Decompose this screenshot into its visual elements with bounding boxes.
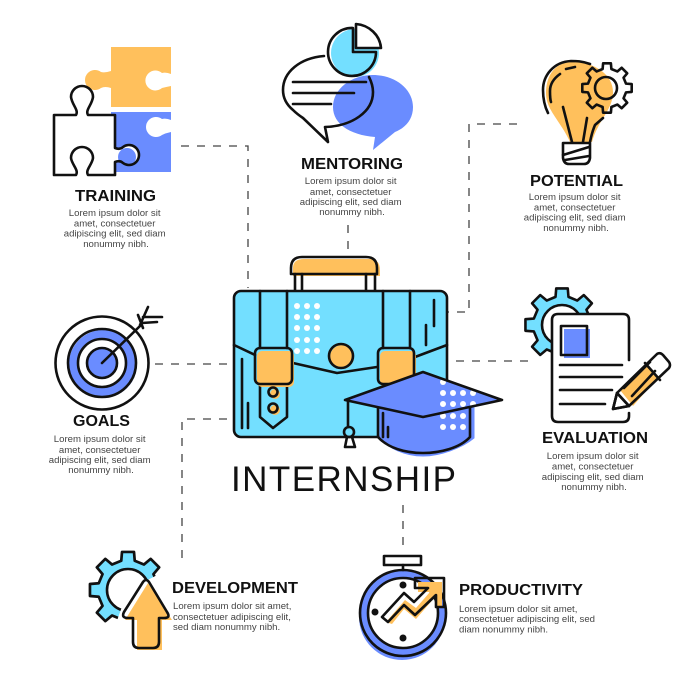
connector: development <box>182 419 227 566</box>
text: goals: Lorem ipsum dolor sit <box>54 434 146 445</box>
text: productivity: diam nonummy nibh. <box>459 624 548 636</box>
text: evaluation: nonummy nibh. <box>561 482 627 493</box>
connector: potential <box>447 124 517 312</box>
panel: potential <box>524 61 632 234</box>
text: evaluation: Lorem ipsum dolor sit <box>547 451 639 462</box>
text: productivity: consectetuer adipiscing elit, sed <box>459 614 595 625</box>
heading: productivity: PRODUCTIVITY <box>459 582 584 599</box>
connector: training <box>181 146 248 288</box>
heading: evaluation: EVALUATION <box>542 430 648 447</box>
text: potential: amet, consectetuer <box>534 202 616 214</box>
text: mentoring: adipiscing elit, sed diam <box>300 197 402 208</box>
text: productivity: Lorem ipsum dolor sit amet, <box>459 604 577 615</box>
text: goals: nonummy nibh. <box>68 465 134 476</box>
text: training: Lorem ipsum dolor sit <box>69 208 161 219</box>
text: development: Lorem ipsum dolor sit amet, <box>173 601 291 612</box>
text: development: consectetuer adipiscing elit, <box>173 612 291 623</box>
connector: productivity <box>402 505 404 546</box>
heading: mentoring: MENTORING <box>301 156 403 173</box>
text: training: amet, consectetuer <box>74 218 156 230</box>
icon: gear with arrow <box>90 552 180 650</box>
title: INTERNSHIP <box>231 460 456 499</box>
connector: goals <box>155 363 227 365</box>
text: evaluation: adipiscing elit, sed diam <box>542 472 644 483</box>
panel: mentoring <box>283 24 413 218</box>
connector: evaluation <box>456 360 530 362</box>
text: development: sed diam nonummy nibh. <box>173 622 280 633</box>
text: goals: amet, consectetuer <box>59 445 141 456</box>
icon: stopwatch with rising arrow <box>359 556 446 660</box>
text: evaluation: amet, consectetuer <box>552 462 634 472</box>
text: training: adipiscing elit, sed diam <box>64 228 166 240</box>
heading: training: TRAINING <box>75 188 156 205</box>
text: goals: adipiscing elit, sed diam <box>49 455 151 466</box>
text: training: nonummy nibh. <box>83 239 149 250</box>
icon: document with gear and pencil <box>525 288 670 422</box>
panel: evaluation <box>525 288 670 493</box>
icon: light bulb with gear <box>543 61 632 164</box>
icon: graduation cap <box>344 372 502 456</box>
text: potential: Lorem ipsum dolor sit <box>529 192 621 203</box>
text: mentoring: nonummy nibh. <box>319 207 385 218</box>
panel: central briefcase <box>231 257 502 499</box>
panel: development <box>90 552 299 650</box>
text: mentoring: amet, consectetuer <box>310 187 392 198</box>
icon: puzzle <box>54 47 171 175</box>
heading: development: DEVELOPMENT <box>172 580 299 597</box>
heading: potential: POTENTIAL <box>530 173 623 190</box>
panel: goals <box>49 307 162 476</box>
icon: briefcase <box>234 257 447 437</box>
text: mentoring: Lorem ipsum dolor sit <box>305 176 397 187</box>
icon: target with arrow <box>56 307 162 410</box>
connector: mentoring <box>347 225 349 252</box>
panel: training <box>54 47 171 250</box>
panel: productivity <box>359 556 598 660</box>
heading: goals: GOALS <box>73 413 130 430</box>
text: potential: adipiscing elit, sed diam <box>524 212 626 224</box>
icon: speech bubbles and pie <box>283 24 413 150</box>
text: potential: nonummy nibh. <box>543 223 609 234</box>
